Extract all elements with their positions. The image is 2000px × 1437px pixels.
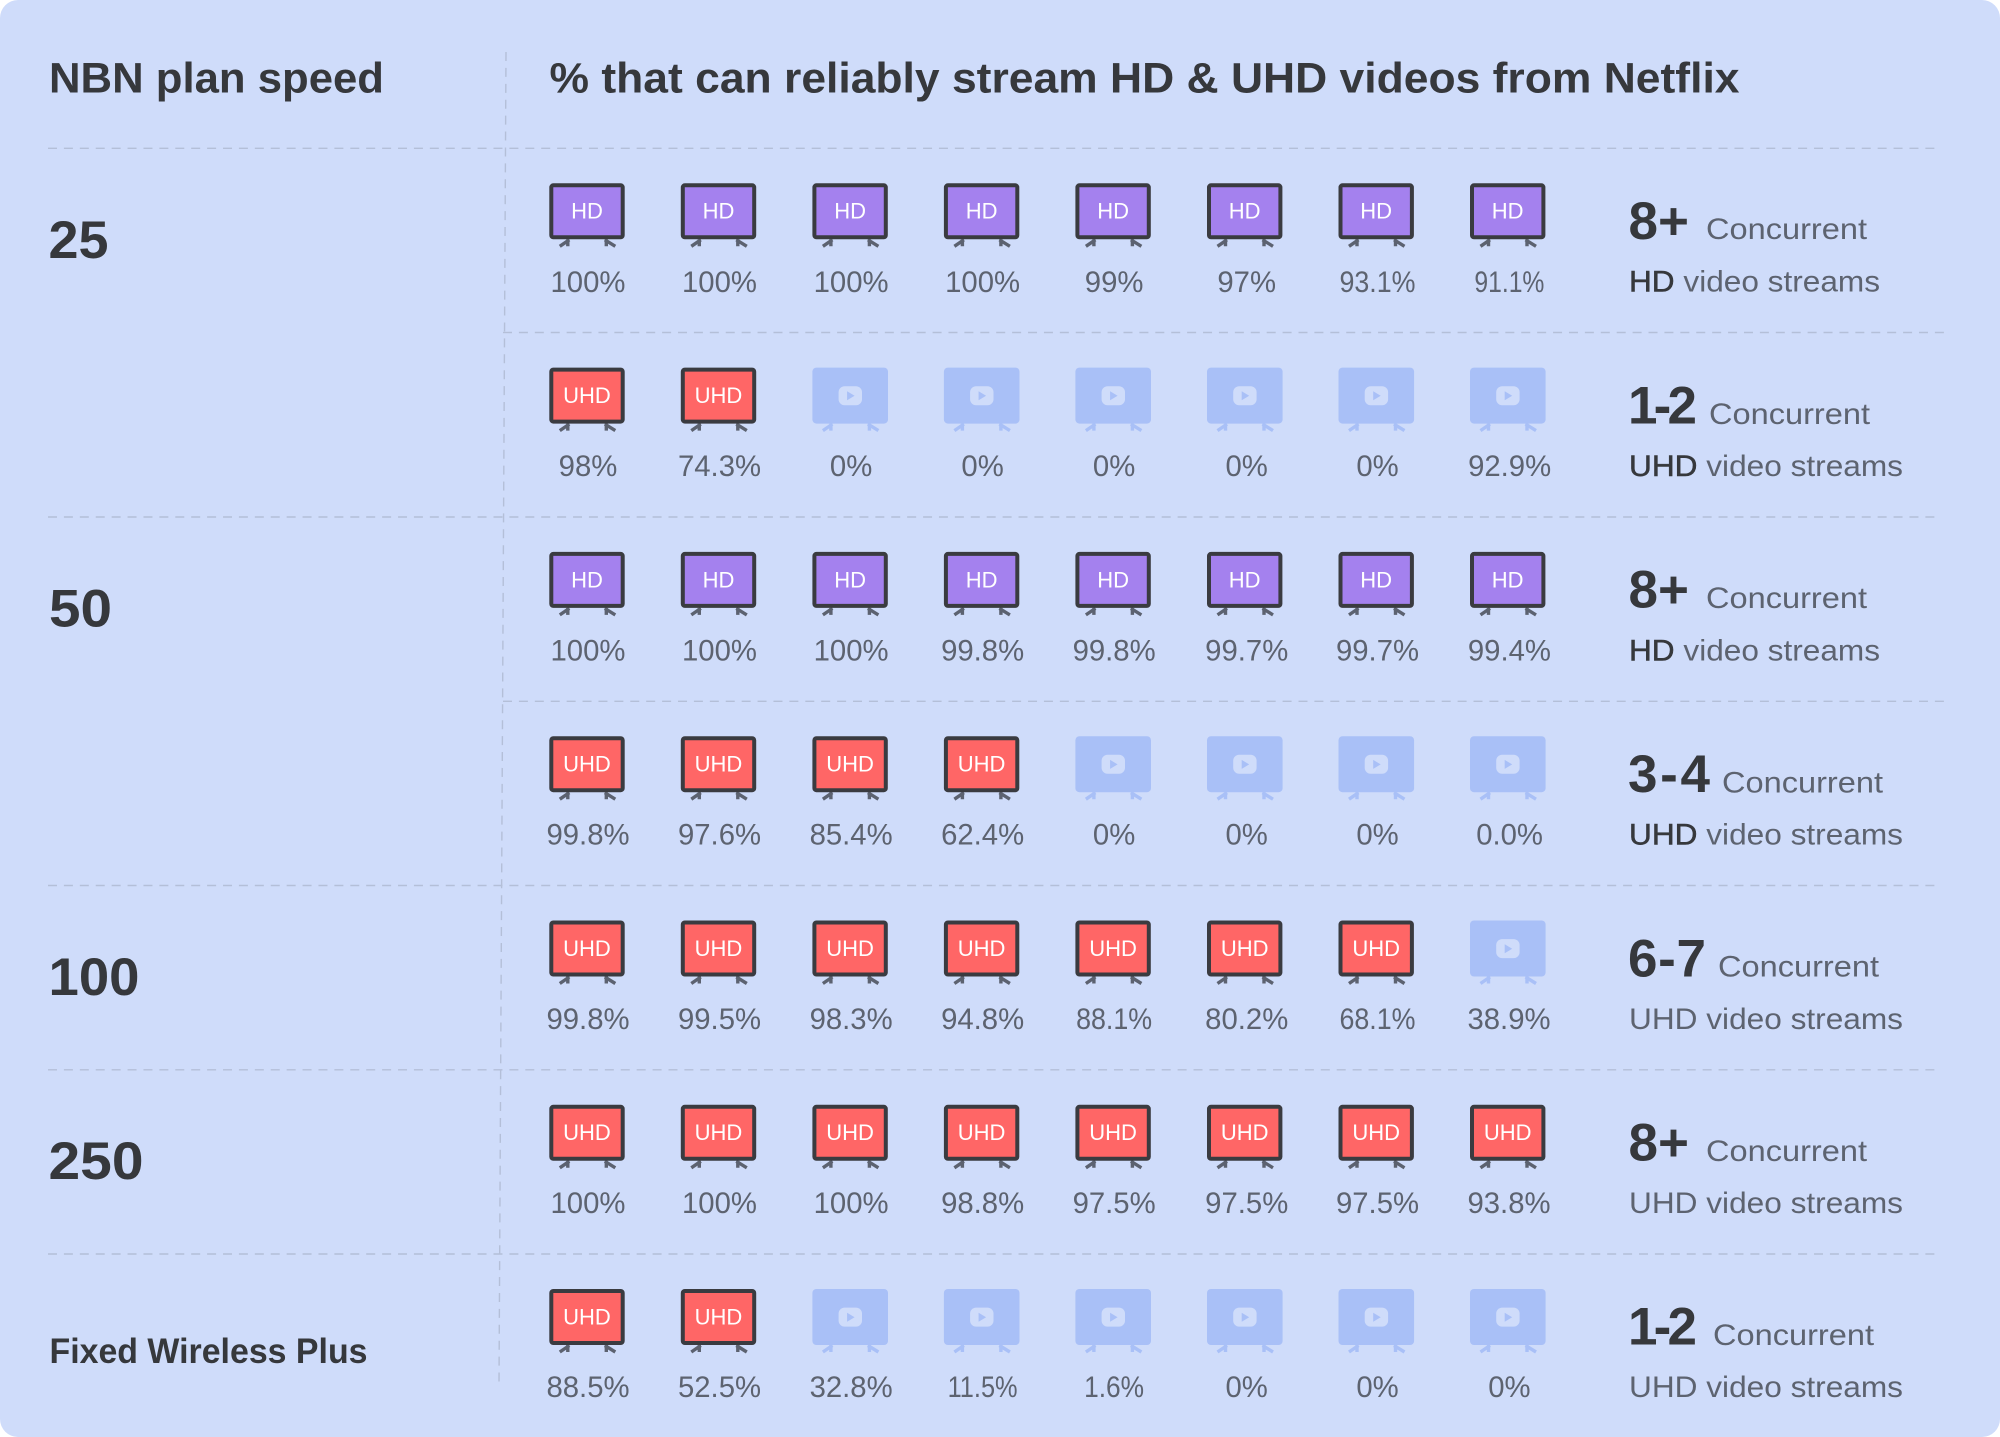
cell: HD 100%: HD xyxy=(571,199,603,224)
heading: percent that can reliably stream: % that can reliably stream HD & UHD videos from Netflix xyxy=(550,54,1740,102)
cell: UHD 88.1%: UHD xyxy=(1089,936,1137,961)
cell: HD 99.4%: HD xyxy=(1492,567,1524,592)
cell: inactive 0% xyxy=(1207,736,1283,852)
cell: HD 99.8% xyxy=(941,554,1024,667)
summary: 100 plan 6-7 UHD: Concurrent xyxy=(1718,951,1880,984)
cell: HD 91.1% xyxy=(1472,185,1544,299)
cell: HD 99.7%: HD xyxy=(1360,567,1392,592)
heading: NBN plan speed: NBN plan speed xyxy=(49,54,384,102)
cell: UHD 74.3%: UHD xyxy=(695,383,742,408)
cell: UHD 97.5% xyxy=(1073,1107,1156,1220)
cell: HD 100%: 100% xyxy=(682,634,757,667)
cell: inactive 0% xyxy=(1338,1289,1414,1404)
cell: UHD 99.8%: UHD xyxy=(563,752,611,777)
cell: HD 99.8%: 99.8% xyxy=(941,634,1024,667)
cell: UHD 98.3%: 98.3% xyxy=(810,1003,893,1036)
row: Fixed Wireless Plus UHD streams xyxy=(546,1289,1546,1404)
cell: inactive 32.8% xyxy=(810,1289,893,1404)
cell: HD 99.7% xyxy=(1336,554,1419,667)
cell: UHD 85.4%: UHD xyxy=(826,752,874,777)
row: 250 plan UHD streams xyxy=(551,1107,1551,1220)
cell: HD 93.1% xyxy=(1340,185,1416,299)
cell: UHD 100%: 100% xyxy=(682,1187,757,1220)
cell: UHD 98% xyxy=(551,370,623,483)
cell: UHD 74.3%: 74.3% xyxy=(678,450,761,483)
summary: 25 plan 8+ HD: HD video streams xyxy=(1629,266,1880,299)
summary: 50 plan 3-4 UHD: 3-4 xyxy=(1628,745,1711,804)
cell: HD 100% xyxy=(551,554,625,667)
cell: HD 99.8%: 99.8% xyxy=(1073,634,1156,667)
summary: 25 plan 8+ HD: 8+ xyxy=(1628,192,1689,251)
cell: HD 100%: HD xyxy=(966,199,997,224)
cell: UHD 99.8% xyxy=(546,922,630,1036)
cell: UHD 88.1%: 88.1% xyxy=(1076,1003,1152,1036)
cell: UHD 97.5%: 97.5% xyxy=(1073,1187,1156,1220)
cell: UHD 62.4%: 62.4% xyxy=(941,819,1024,852)
cell: HD 99.4% xyxy=(1468,554,1551,667)
summary: 50 plan 3-4 UHD xyxy=(1628,745,1903,852)
cell: HD 91.1%: HD xyxy=(1492,199,1524,224)
cell: UHD 93.8%: 93.8% xyxy=(1467,1187,1551,1220)
summary: 250 plan 8+ UHD: Concurrent xyxy=(1706,1135,1868,1168)
summary: 50 plan 8+ HD: HD video streams xyxy=(1629,634,1880,667)
cell: HD 99.7%: 99.7% xyxy=(1336,634,1419,667)
cell: UHD 88.1% xyxy=(1076,922,1152,1036)
cell: HD 99%: 99% xyxy=(1085,266,1143,299)
summary: 25 plan 1-2 UHD: Concurrent xyxy=(1709,398,1871,431)
cell: UHD 99.5% xyxy=(678,922,761,1036)
cell: HD 100% xyxy=(945,185,1020,299)
cell: HD 99.8%: HD xyxy=(966,567,997,592)
summary: Fixed Wireless Plus 1-2 UHD: 1-2 xyxy=(1628,1298,1697,1356)
cell: UHD 88.5%: 88.5% xyxy=(546,1371,630,1404)
cell: inactive 0% xyxy=(812,368,888,483)
cell: inactive 92.9%: 92.9% xyxy=(1468,450,1551,483)
cell: UHD 98%: 98% xyxy=(559,450,617,483)
summary: 25 plan 8+ HD: Concurrent xyxy=(1706,213,1868,246)
cell: UHD 94.8% xyxy=(941,922,1024,1036)
cell: HD 100%: 100% xyxy=(814,266,889,299)
summary: 100 plan 6-7 UHD: UHD video streams xyxy=(1629,1003,1903,1036)
cell: UHD 99.5%: 99.5% xyxy=(678,1003,761,1036)
cell: HD 99.8%: HD xyxy=(1097,567,1129,592)
row: 50 plan UHD streams xyxy=(546,736,1546,852)
cell: HD 100%: 100% xyxy=(945,266,1020,299)
cell: HD 99%: HD xyxy=(1097,199,1129,224)
cell: HD 100%: HD xyxy=(703,567,734,592)
row label: 100: 100 xyxy=(48,948,140,1007)
row label: 50: 50 xyxy=(49,580,112,638)
cell: inactive 0% xyxy=(1338,736,1414,852)
cell: HD 100%: 100% xyxy=(551,266,625,299)
cell: HD 97%: HD xyxy=(1229,199,1261,224)
summary: 250 plan 8+ UHD: UHD video streams xyxy=(1629,1187,1903,1220)
cell: inactive 0% xyxy=(1338,368,1414,483)
cell: inactive 0%: 0% xyxy=(1226,450,1268,483)
cell: HD 100%: 100% xyxy=(551,634,625,667)
cell: UHD 93.8%: UHD xyxy=(1484,1120,1532,1145)
cell: inactive 0%: 0% xyxy=(1093,450,1135,483)
cell: inactive 0% xyxy=(1075,368,1151,483)
cell: inactive 0% xyxy=(1207,1289,1283,1404)
cell: UHD 98.8%: UHD xyxy=(958,1120,1005,1145)
cell: inactive 0.0% xyxy=(1470,736,1546,852)
cell: inactive 0% xyxy=(944,368,1020,483)
cell: UHD 97.6%: UHD xyxy=(695,752,742,777)
cell: inactive 0% xyxy=(1075,736,1151,852)
cell: inactive 1.6% xyxy=(1075,1289,1151,1404)
cell: UHD 80.2%: 80.2% xyxy=(1205,1003,1288,1036)
cell: HD 100%: HD xyxy=(834,199,866,224)
cell: HD 100%: HD xyxy=(571,567,603,592)
cell: UHD 97.5% xyxy=(1205,1107,1288,1220)
cell: HD 93.1%: HD xyxy=(1360,199,1392,224)
cell: HD 99% xyxy=(1077,185,1149,299)
cell: inactive 11.5% xyxy=(944,1289,1020,1404)
cell: UHD 85.4% xyxy=(810,738,893,852)
cell: HD 99.7%: 99.7% xyxy=(1205,634,1288,667)
cell: HD 100% xyxy=(551,185,625,299)
cell: UHD 68.1% xyxy=(1340,922,1416,1036)
summary: 50 plan 3-4 UHD: UHD video streams xyxy=(1629,819,1903,852)
cell: HD 100% xyxy=(682,185,757,299)
cell: UHD 100%: UHD xyxy=(826,1120,874,1145)
cell: UHD 99.8%: UHD xyxy=(563,936,611,961)
cell: UHD 80.2%: UHD xyxy=(1221,936,1269,961)
cell: HD 100%: HD xyxy=(834,567,866,592)
cell: UHD 98.8%: 98.8% xyxy=(941,1187,1024,1220)
cell: inactive 92.9% xyxy=(1468,368,1551,483)
cell: UHD 74.3% xyxy=(678,370,761,483)
cell: inactive 0.0%: 0.0% xyxy=(1476,819,1543,852)
summary: 250 plan 8+ UHD xyxy=(1628,1114,1903,1220)
summary: 50 plan 8+ HD: 8+ xyxy=(1628,561,1689,620)
cell: UHD 100%: UHD xyxy=(563,1120,611,1145)
cell: UHD 100% xyxy=(814,1107,889,1220)
cell: inactive 0%: 0% xyxy=(1356,450,1399,483)
cell: inactive 0%: 0% xyxy=(830,450,872,483)
cell: inactive 32.8%: 32.8% xyxy=(810,1371,893,1404)
cell: HD 100% xyxy=(814,185,889,299)
cell: UHD 100%: 100% xyxy=(814,1187,889,1220)
summary: Fixed Wireless Plus 1-2 UHD: UHD video streams xyxy=(1629,1371,1903,1404)
summary: 250 plan 8+ UHD: 8+ xyxy=(1628,1114,1689,1172)
cell: HD 99.4%: 99.4% xyxy=(1468,634,1551,667)
summary: 25 plan 1-2 UHD: UHD video streams xyxy=(1629,450,1903,483)
cell: inactive 0% xyxy=(1207,368,1283,483)
cell: inactive 0% xyxy=(1470,1289,1546,1404)
cell: UHD 88.5% xyxy=(546,1291,630,1404)
row: 50 plan HD streams xyxy=(551,554,1551,667)
cell: HD 93.1%: 93.1% xyxy=(1340,266,1416,299)
cell: UHD 97.5%: UHD xyxy=(1221,1120,1269,1145)
cell: UHD 100%: 100% xyxy=(551,1187,625,1220)
cell: UHD 68.1%: UHD xyxy=(1352,936,1400,961)
cell: UHD 62.4% xyxy=(941,738,1024,852)
cell: UHD 88.5%: UHD xyxy=(563,1304,611,1329)
summary: 100 plan 6-7 UHD: 6-7 xyxy=(1628,929,1706,988)
cell: UHD 97.5% xyxy=(1336,1107,1419,1220)
row: 25 plan UHD streams xyxy=(551,368,1551,483)
cell: UHD 52.5%: 52.5% xyxy=(678,1371,761,1404)
cell: UHD 52.5%: UHD xyxy=(695,1304,742,1329)
summary: 100 plan 6-7 UHD xyxy=(1628,929,1903,1036)
cell: inactive 38.9%: 38.9% xyxy=(1467,1003,1551,1036)
row: 100 plan UHD streams xyxy=(546,920,1551,1036)
cell: UHD 85.4%: 85.4% xyxy=(810,819,893,852)
cell: UHD 97.6% xyxy=(678,738,761,852)
cell: UHD 68.1%: 68.1% xyxy=(1340,1003,1416,1036)
cell: inactive 0%: 0% xyxy=(1488,1371,1531,1404)
cell: inactive 0%: 0% xyxy=(1226,1371,1268,1404)
cell: UHD 97.6%: 97.6% xyxy=(678,819,761,852)
cell: HD 100%: 100% xyxy=(814,634,889,667)
cell: HD 99.8% xyxy=(1073,554,1156,667)
summary: 50 plan 8+ HD: Concurrent xyxy=(1706,582,1868,615)
cell: UHD 100% xyxy=(551,1107,625,1220)
cell: UHD 99.8% xyxy=(546,738,630,852)
cell: UHD 97.5%: 97.5% xyxy=(1205,1187,1288,1220)
cell: UHD 94.8%: UHD xyxy=(958,936,1005,961)
row label: 25: 25 xyxy=(48,211,108,270)
cell: UHD 98%: UHD xyxy=(563,383,611,408)
cell: HD 99.7%: HD xyxy=(1229,567,1261,592)
cell: inactive 0%: 0% xyxy=(1356,819,1399,852)
cell: UHD 52.5% xyxy=(678,1291,761,1404)
summary: 50 plan 3-4 UHD: Concurrent xyxy=(1722,766,1884,799)
cell: UHD 97.5%: 97.5% xyxy=(1336,1187,1419,1220)
cell: inactive 0%: 0% xyxy=(961,450,1004,483)
cell: UHD 93.8% xyxy=(1467,1107,1551,1220)
summary: 25 plan 1-2 UHD: 1-2 xyxy=(1628,376,1697,436)
cell: HD 100% xyxy=(682,554,757,667)
cell: UHD 97.5%: UHD xyxy=(1089,1120,1137,1145)
summary: Fixed Wireless Plus 1-2 UHD: Concurrent xyxy=(1713,1319,1875,1352)
row label: Fixed Wireless Plus: Fixed Wireless Plus xyxy=(50,1332,368,1371)
cell: UHD 100% xyxy=(682,1107,757,1220)
cell: HD 97% xyxy=(1209,185,1280,299)
summary: Fixed Wireless Plus 1-2 UHD xyxy=(1628,1298,1903,1404)
cell: UHD 62.4%: UHD xyxy=(958,752,1005,777)
cell: inactive 1.6%: 1.6% xyxy=(1084,1371,1144,1404)
cell: UHD 99.8%: 99.8% xyxy=(546,1003,630,1036)
cell: inactive 11.5%: 11.5% xyxy=(948,1371,1018,1404)
cell: UHD 98.8% xyxy=(941,1107,1024,1220)
cell: inactive 0%: 0% xyxy=(1226,819,1268,852)
summary: 25 plan 8+ HD xyxy=(1628,192,1880,299)
cell: UHD 94.8%: 94.8% xyxy=(941,1003,1024,1036)
summary: 25 plan 1-2 UHD xyxy=(1628,376,1903,483)
cell: inactive 38.9% xyxy=(1467,920,1551,1036)
cell: HD 97%: 97% xyxy=(1217,266,1276,299)
cell: inactive 0%: 0% xyxy=(1093,819,1135,852)
cell: UHD 99.5%: UHD xyxy=(695,936,742,961)
cell: UHD 97.5%: UHD xyxy=(1352,1120,1400,1145)
cell: HD 100% xyxy=(814,554,889,667)
cell: UHD 98.3% xyxy=(810,922,893,1036)
row: 25 plan HD streams xyxy=(551,185,1544,299)
cell: UHD 100%: UHD xyxy=(695,1120,742,1145)
cell: HD 100%: HD xyxy=(703,199,734,224)
row label: 250: 250 xyxy=(48,1132,144,1191)
cell: inactive 0%: 0% xyxy=(1356,1371,1399,1404)
cell: HD 91.1%: 91.1% xyxy=(1474,266,1544,299)
cell: HD 100%: 100% xyxy=(682,266,757,299)
summary: 50 plan 8+ HD xyxy=(1628,561,1880,667)
cell: HD 99.7% xyxy=(1205,554,1288,667)
cell: UHD 80.2% xyxy=(1205,922,1288,1036)
cell: UHD 99.8%: 99.8% xyxy=(546,819,630,852)
cell: UHD 98.3%: UHD xyxy=(826,936,874,961)
